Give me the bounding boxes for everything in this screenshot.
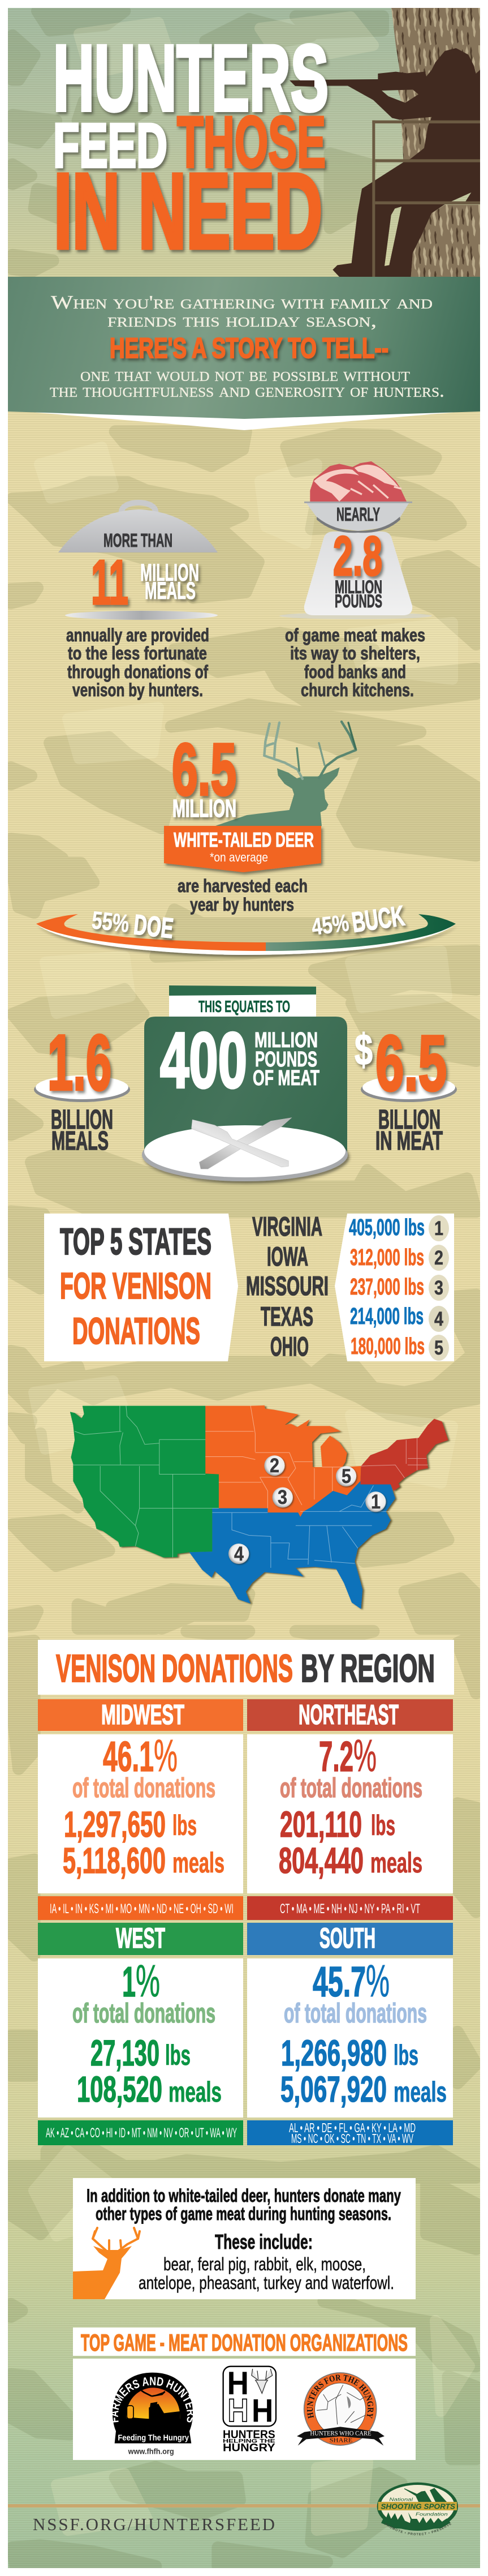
text: annually: to the less fortunate	[68, 643, 207, 663]
stat: 11 million meals cloche: 11	[91, 547, 128, 618]
logo: farmers and hunters: www.fhfh.org	[128, 2447, 174, 2456]
panel: northeast: %	[353, 1730, 377, 1781]
panel: midwest: meals	[172, 1847, 224, 1879]
rank badges	[429, 1215, 449, 1361]
map pin numbers	[234, 1455, 381, 1565]
intro text top: When you're gathering with family and	[51, 292, 433, 313]
stat: $6.5 billion in meat: IN MEAT	[375, 1126, 443, 1155]
logo: national shooting sports foundation: National	[389, 2497, 414, 2502]
title: THOSE	[177, 102, 326, 183]
stat: 6.5 million white-tailed deer: MILLION	[172, 795, 236, 822]
million pounds of meat: OF MEAT	[253, 1066, 319, 1090]
label: 45% buck	[310, 899, 407, 940]
icon: orange deer	[73, 2228, 140, 2299]
logo: hunters for the hungry: HUNTERS FOR THE HUNGRY	[306, 2375, 373, 2419]
label: 55% doe: DOE	[132, 908, 175, 944]
logo: hunters helping the hungry: H	[227, 2393, 249, 2429]
text: annually: annually are provided	[66, 625, 209, 645]
text: of game meat: of game meat makes	[285, 625, 425, 645]
panel: top 5 states heading: DONATIONS	[72, 1310, 200, 1352]
panel: midwest: 46.1	[103, 1733, 154, 1780]
panel: west: meals	[169, 2076, 222, 2108]
state names list: OHIO	[270, 1331, 309, 1361]
logo: hunters helping the hungry: H	[227, 2365, 249, 2402]
logo: hunters helping the hungry	[223, 2365, 276, 2454]
panel: west: lbs	[165, 2039, 191, 2071]
rifle barrel in front of title	[290, 80, 314, 87]
rank badges: 3	[434, 1277, 443, 1299]
icon: deer	[215, 722, 356, 826]
stat: 1.6 billion meals: BILLION	[51, 1105, 113, 1135]
panel: state pounds ranking: 237,000 lbs	[350, 1274, 424, 1300]
text: annually	[66, 625, 209, 700]
panel: west	[38, 1922, 243, 2145]
panel: other game meat: antelope, pheasant, turkey and waterfowl.	[139, 2273, 394, 2293]
intro text bottom: the thoughtfulness and generosity of hunters.	[50, 380, 444, 401]
panel: state pounds ranking: 214,000 lbs	[350, 1303, 424, 1329]
rank badges: 4	[434, 1308, 443, 1330]
panel: west: %	[136, 1956, 160, 2006]
stat: 11 million meals cloche	[58, 503, 218, 700]
title: FEED	[53, 111, 167, 181]
panel: south: meals	[394, 2076, 447, 2108]
footer rule	[8, 2504, 480, 2508]
stat: 6.5 million white-tailed deer	[164, 722, 356, 915]
midwest region	[205, 1405, 361, 1517]
stat: 11 million meals cloche: MILLION	[140, 559, 199, 586]
panel: west: WEST	[116, 1922, 165, 1954]
panel: west: 1	[122, 1958, 136, 2005]
million pounds of meat: POUNDS	[255, 1048, 317, 1071]
rank badges: 1	[434, 1218, 443, 1240]
panel: midwest: IA • IL • IN • KS • MI • MO • MN • ND • NE • OH • SD • WI	[50, 1901, 234, 1917]
stat: 6.5 million white-tailed deer: 6.5	[172, 728, 236, 811]
logo: farmers and hunters: FARMERS AND HUNTERS	[112, 2377, 193, 2423]
banner: *on average	[210, 850, 268, 864]
map: US regions	[70, 1405, 448, 1609]
panel: south: 5,067,920	[280, 2069, 387, 2110]
text: harvested: year by hunters	[190, 894, 294, 915]
story to tell heading: HERE'S A STORY TO TELL--	[110, 332, 388, 364]
tree trunk	[391, 8, 480, 277]
text: of game meat: food banks and	[304, 662, 406, 682]
state names list: MISSOURI	[246, 1271, 329, 1301]
panel: other game meat: bear, feral pig, rabbit, elk, moose,	[163, 2254, 366, 2274]
panel: northeast: 7.2	[319, 1733, 353, 1780]
panel: northeast: NORTHEAST	[299, 1700, 399, 1730]
hunter silhouette with rifle	[314, 48, 480, 277]
label: 45% buck: 45%	[310, 909, 351, 940]
text: annually: through donations of	[67, 662, 208, 682]
chalkboard panel	[144, 1017, 347, 1153]
logo: farmers and hunters: Feeding The Hungry	[118, 2434, 189, 2443]
stat: $6.5 billion in meat: 6.5	[375, 1019, 447, 1107]
this equates to: 400 million pounds: 400	[160, 1017, 247, 1104]
map pin numbers: 1	[371, 1491, 381, 1513]
icon: scale bowl and weight	[304, 502, 412, 615]
map pin numbers: 5	[342, 1465, 351, 1488]
stat: 2.8 million pounds scale: MILLION	[335, 577, 382, 597]
icon: cloche	[58, 503, 218, 620]
panel: top 5 states heading: FOR VENISON	[60, 1265, 211, 1306]
label: 55% doe	[90, 906, 175, 944]
map pin numbers: 3	[278, 1486, 287, 1508]
icon: plate with fork and knife	[142, 1118, 348, 1181]
stat: 11 million meals cloche: MEALS	[145, 577, 196, 605]
map pins	[228, 1455, 386, 1564]
state names list: IOWA	[267, 1241, 308, 1271]
panel: state pounds ranking: 180,000 lbs	[351, 1333, 425, 1359]
map pin numbers: 2	[270, 1455, 279, 1477]
stat: $6.5 billion in meat: BILLION	[378, 1105, 441, 1135]
panel: midwest: lbs	[172, 1810, 197, 1841]
banner: WHITE-TAILED DEER	[174, 828, 314, 851]
intro text top	[51, 292, 433, 331]
panel: top 5 states heading: TOP 5 STATES	[60, 1220, 211, 1262]
stat: 2.8 million pounds scale: 2.8	[333, 525, 382, 587]
intro text bottom: one that would not be possible without	[80, 365, 410, 385]
doe and buck swoosh	[36, 899, 456, 955]
tab: THIS EQUATES TO	[198, 998, 290, 1016]
panel: midwest: 1,297,650	[64, 1804, 166, 1845]
panel: south: SOUTH	[319, 1922, 375, 1954]
stat: 11 million meals cloche: MORE THAN	[103, 530, 172, 551]
logo: hunters helping the hungry: H	[252, 2393, 273, 2429]
panel: midwest: of total donations	[72, 1773, 215, 1803]
doe bar	[36, 914, 266, 951]
label: 55% doe: 55%	[90, 906, 131, 938]
panel: south: 45.7	[313, 1958, 366, 2005]
stat: 1.6 billion meals: MEALS	[51, 1126, 109, 1155]
panel: west: of total donations	[72, 1999, 215, 2029]
intro text bottom	[50, 365, 444, 401]
label: 45% buck: BUCK	[350, 899, 407, 938]
stat: $6.5 billion in meat	[355, 1019, 457, 1155]
logo: national shooting sports foundation: SHOOTING SPORTS	[381, 2502, 455, 2511]
stat: 1.6 billion meals: 1.6	[47, 1019, 111, 1107]
northeast region	[360, 1419, 448, 1491]
logo: hunters helping the hungry: HUNTERS	[223, 2428, 275, 2441]
panel: northeast: meals	[370, 1847, 422, 1879]
panel: state pounds ranking: 312,000 lbs	[350, 1244, 424, 1270]
title: IN NEED	[54, 152, 322, 271]
panel: west: 27,130	[90, 2033, 159, 2073]
panel: midwest: 5,118,600	[63, 1840, 166, 1881]
panel: other game meat: These include:	[215, 2230, 313, 2253]
text: harvested	[178, 876, 308, 915]
text: of game meat: its way to shelters,	[290, 643, 420, 663]
panel: south: lbs	[394, 2039, 418, 2071]
panel: northeast: 804,440	[279, 1840, 364, 1881]
logo: hunters for the hungry: HUNTERS WHO CARE	[310, 2431, 372, 2437]
stat: 1.6 billion meals	[34, 1019, 130, 1155]
panel: south	[247, 1922, 453, 2146]
tree stand rails	[372, 121, 480, 277]
intro text top: friends this holiday season,	[107, 310, 377, 331]
logo: hunters helping the hungry: HUNGRY	[223, 2442, 275, 2454]
text: harvested: are harvested each	[178, 876, 308, 896]
tab	[169, 985, 316, 1017]
logo: farmers and hunters	[112, 2373, 193, 2456]
panel: state pounds ranking	[335, 1214, 454, 1361]
buck bar	[266, 914, 456, 951]
panel: state pounds ranking: 405,000 lbs	[349, 1214, 425, 1240]
panel: northeast: lbs	[371, 1810, 395, 1841]
logo: hunters for the hungry: SHARE	[330, 2438, 352, 2444]
panel: organization logos	[73, 2359, 416, 2460]
this equates to: 400 million pounds	[142, 985, 348, 1181]
banner	[164, 826, 321, 872]
logo: national shooting sports foundation	[377, 2483, 458, 2536]
panel: midwest: %	[154, 1730, 178, 1781]
logo: national shooting sports foundation: Foundation	[416, 2511, 448, 2517]
text: of game meat: church kitchens.	[301, 680, 414, 700]
text: of game meat	[285, 625, 425, 700]
million pounds of meat: MILLION	[254, 1028, 318, 1052]
state names list: TEXAS	[261, 1301, 313, 1331]
million pounds of meat	[253, 1028, 319, 1090]
state names list	[246, 1211, 329, 1361]
intro band	[8, 277, 480, 430]
state names list: VIRGINIA	[252, 1211, 322, 1241]
stat: 2.8 million pounds scale: POUNDS	[335, 591, 382, 611]
panel: other game meat	[73, 2178, 416, 2299]
text: annually: venison by hunters.	[72, 680, 203, 700]
panel: south: %	[366, 1956, 390, 2006]
panel: northeast	[247, 1699, 453, 1920]
logo: hunters helping the hungry: HELPING THE	[223, 2438, 275, 2444]
logo: hunters for the hungry	[297, 2372, 385, 2446]
rank badges: 2	[434, 1247, 443, 1269]
icon: meat	[310, 461, 407, 502]
stat: $6.5 billion in meat: $	[355, 1025, 373, 1074]
stat: 2.8 million pounds scale	[279, 461, 432, 700]
map pin numbers: 4	[234, 1543, 244, 1565]
panel: west: AK • AZ • CA • CO • HI • ID • MT • NM • NV • OR • UT • WA • WY	[46, 2125, 237, 2141]
panel: midwest: MIDWEST	[101, 1700, 184, 1730]
panel: top 5 states heading	[44, 1214, 238, 1361]
panel: northeast: 201,110	[280, 1804, 362, 1845]
footer url: NSSF.ORG/HUNTERSFEED	[33, 2514, 275, 2534]
rank badges: 5	[434, 1337, 443, 1359]
west region	[70, 1406, 219, 1557]
panel: west: 108,520	[77, 2069, 162, 2110]
stat: 2.8 million pounds scale: NEARLY	[336, 504, 380, 525]
logo: national shooting sports foundation: PROMOTE • PROTECT • PRESERVE	[385, 2522, 451, 2536]
state border lines	[73, 1406, 428, 1568]
panel: south: 1,266,980	[281, 2033, 387, 2073]
panel: midwest	[38, 1699, 243, 1920]
south region	[189, 1481, 395, 1609]
panel: venison donations by region title: VENISON DONATIONS	[56, 1647, 293, 1690]
title	[53, 26, 329, 271]
